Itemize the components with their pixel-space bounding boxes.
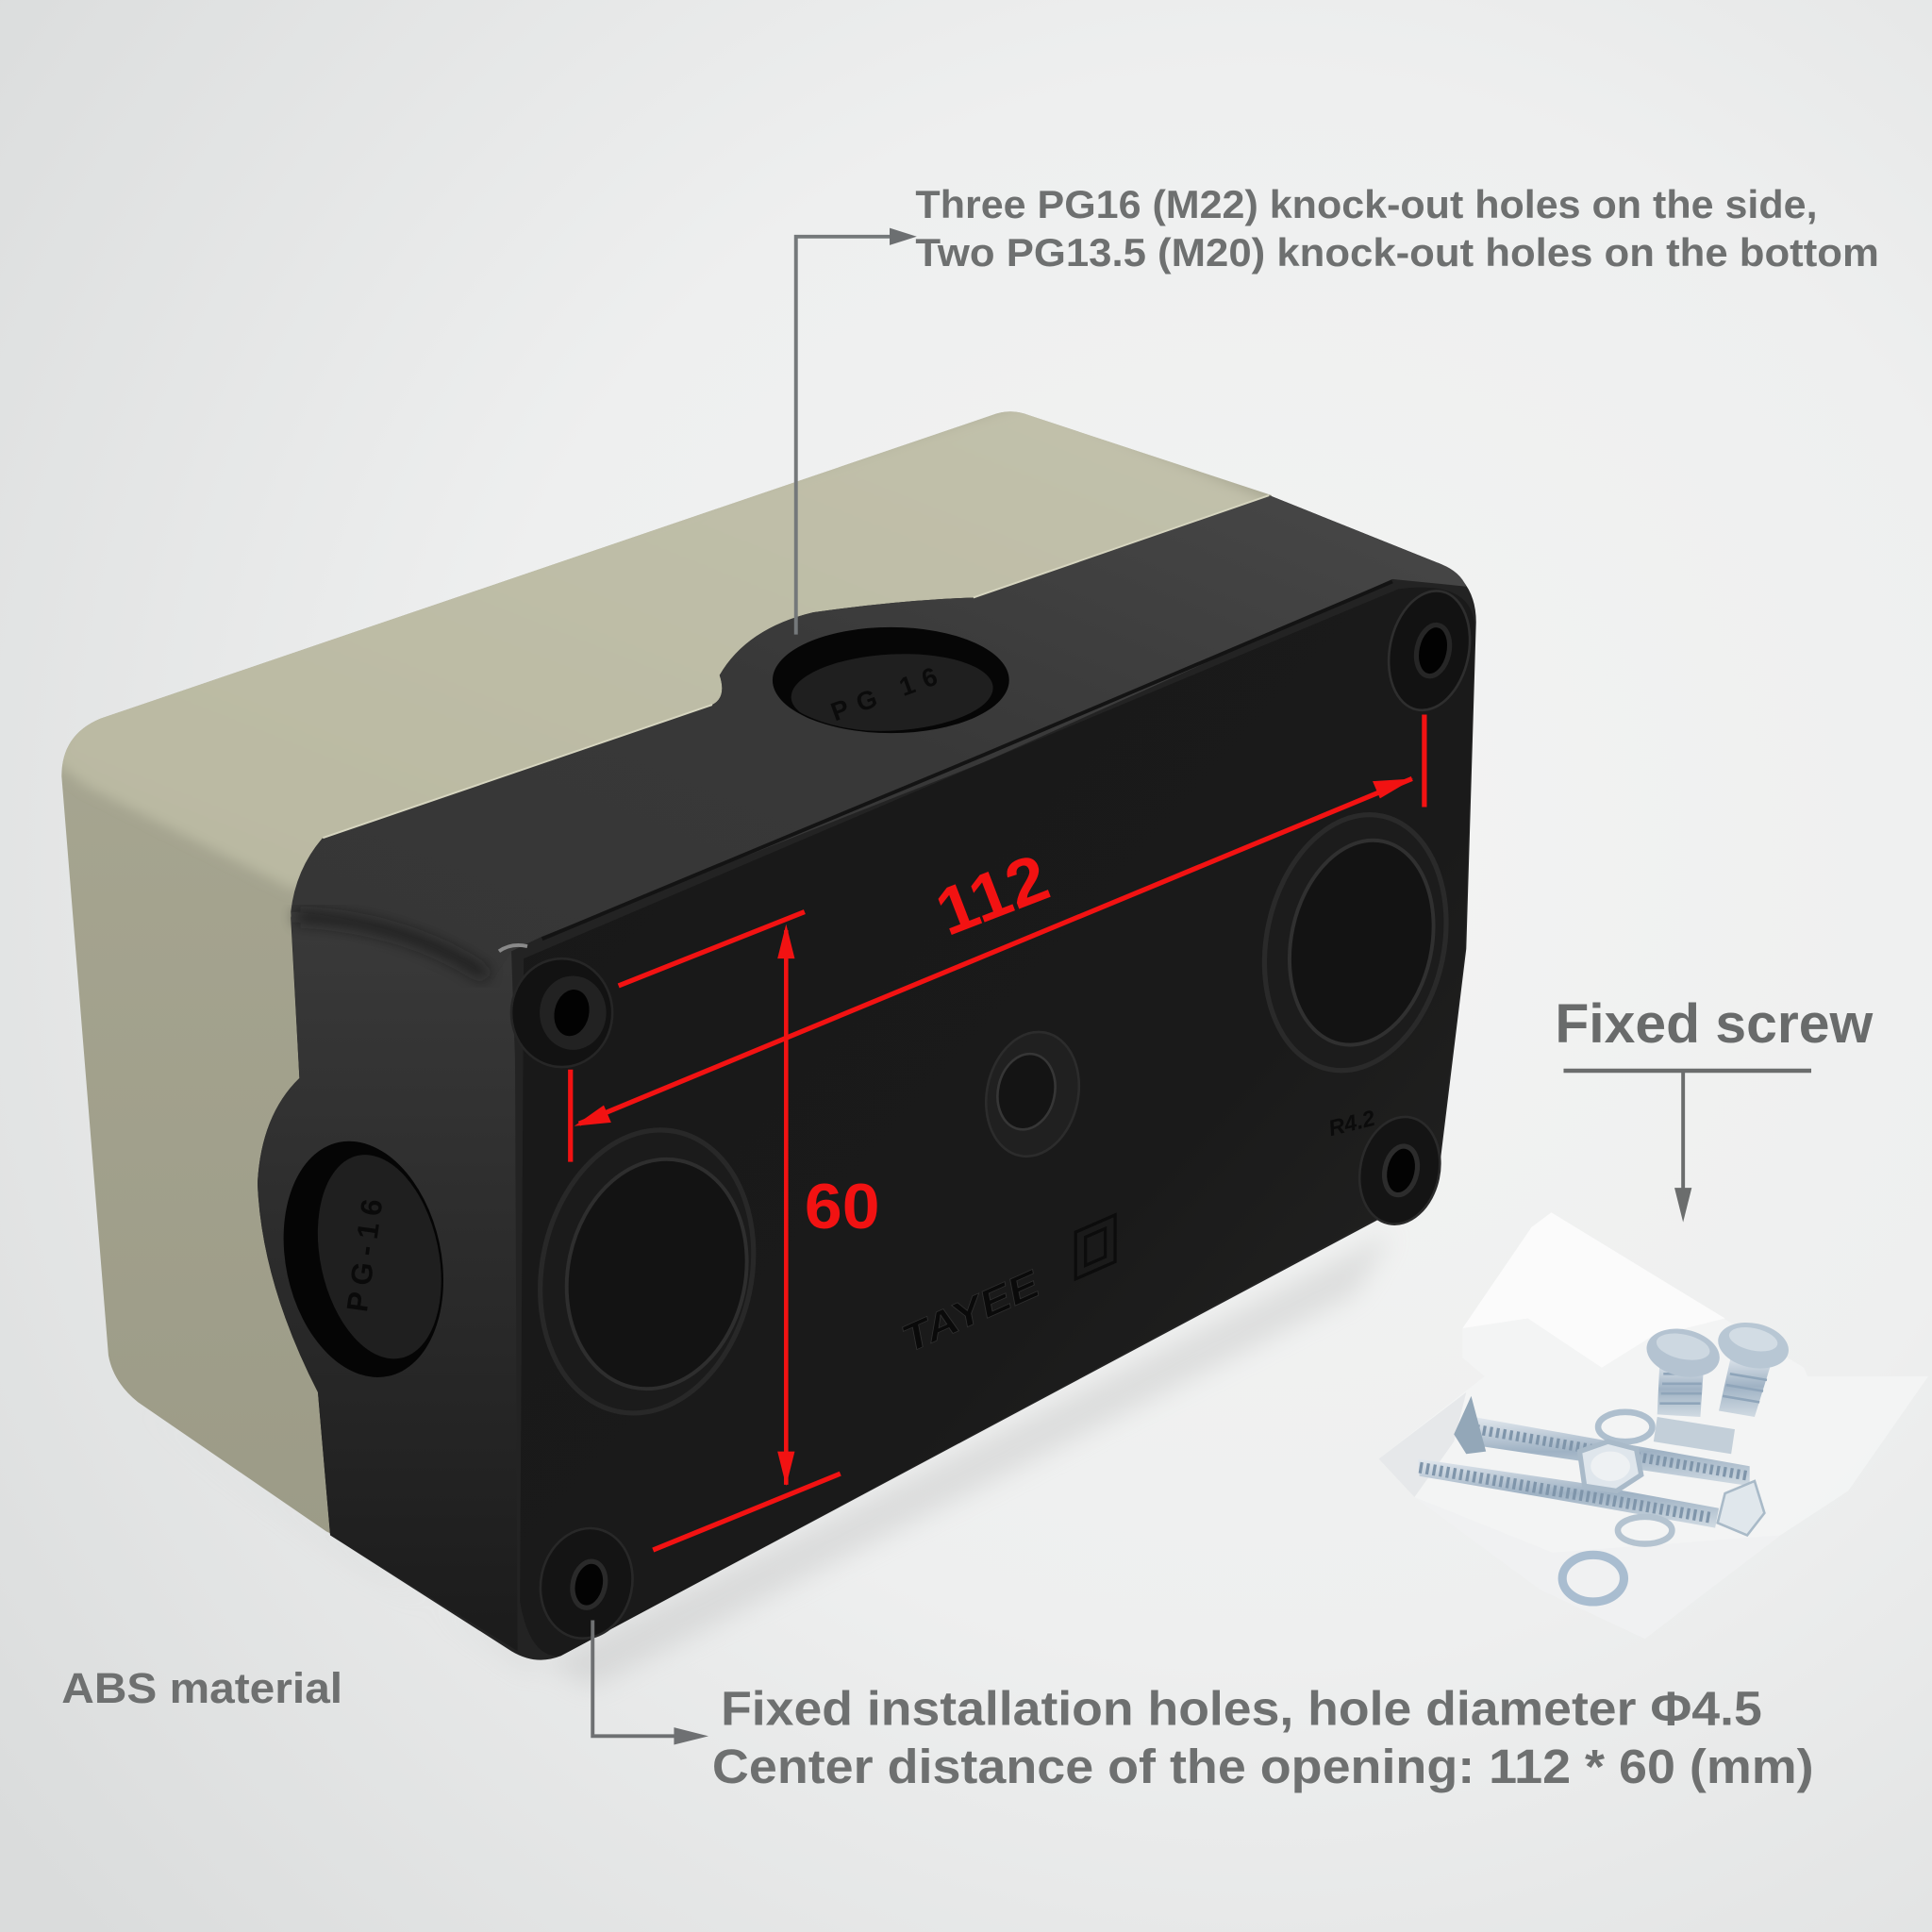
carriage bolt (1714, 1316, 1793, 1417)
long screw (1454, 1396, 1750, 1486)
screw hole: bottom right (1350, 1109, 1450, 1232)
panel: bag of screws (1379, 1212, 1928, 1639)
beige seam (323, 495, 1269, 838)
bottom-left knock-out (515, 1110, 779, 1433)
embossed mark: R4.2: R4.2 (1326, 1106, 1377, 1141)
beige housing (49, 400, 1281, 1553)
callout: knock-out holes: Two PG13.5 (M20) knock-out holes on the bottom (915, 230, 1879, 275)
washer behind screws (1598, 1412, 1653, 1441)
callout: knock-out holes: Three PG16 (M22) knock-out holes on the side, (915, 182, 1818, 226)
dimension: 112 diagonal (571, 715, 1424, 1162)
label: ABS material: ABS material (61, 1664, 342, 1712)
screw hole: top right (1378, 583, 1480, 718)
arrow: fixed screw (1563, 1071, 1811, 1223)
callout: installation holes: Fixed installation holes, hole diameter Φ4.5 (721, 1682, 1762, 1736)
black base (258, 495, 1476, 1660)
embossed logo: TAYEE: TAYEE (895, 1261, 1046, 1360)
top strip (291, 495, 1466, 979)
front face (520, 588, 1474, 1657)
washer (1562, 1555, 1624, 1602)
carriage bolt (1642, 1323, 1724, 1417)
left strip (258, 912, 518, 1651)
washer under screws (1618, 1517, 1672, 1544)
edge highlights (542, 581, 1392, 939)
T-nut (1654, 1417, 1735, 1454)
dimension: 60 vertical (619, 912, 880, 1550)
dimension: 60 vertical: 60 (805, 1172, 880, 1242)
screw hole: top left (511, 958, 612, 1067)
callout: knock-out holes (915, 182, 1879, 275)
side knock-out hole (283, 1141, 443, 1377)
centre plug (974, 1024, 1091, 1165)
long screw (1418, 1458, 1719, 1528)
plastic bag (1379, 1212, 1928, 1639)
label: fixed screw: Fixed screw (1555, 993, 1874, 1055)
embossed square mark (1075, 1215, 1115, 1279)
callout: installation holes (712, 1682, 1814, 1793)
small nut (1718, 1481, 1764, 1535)
arrow: installation holes (592, 1621, 708, 1744)
dimension: 112 diagonal: 112 (925, 840, 1058, 950)
plug marking: PG 16 (827, 661, 941, 726)
screw hole: bottom left (530, 1520, 642, 1647)
panel: junction box (49, 400, 1480, 1688)
plug marking: PG-16 (341, 1197, 389, 1314)
right knock-out (1241, 797, 1469, 1088)
box shadow (136, 1232, 1392, 1688)
top knock-out hole (773, 627, 1009, 736)
hex nut (1579, 1441, 1641, 1491)
callout: installation holes: Center distance of the opening: 112 * 60 (mm) (712, 1740, 1814, 1793)
callout arrow: knock-out holes (796, 228, 917, 635)
